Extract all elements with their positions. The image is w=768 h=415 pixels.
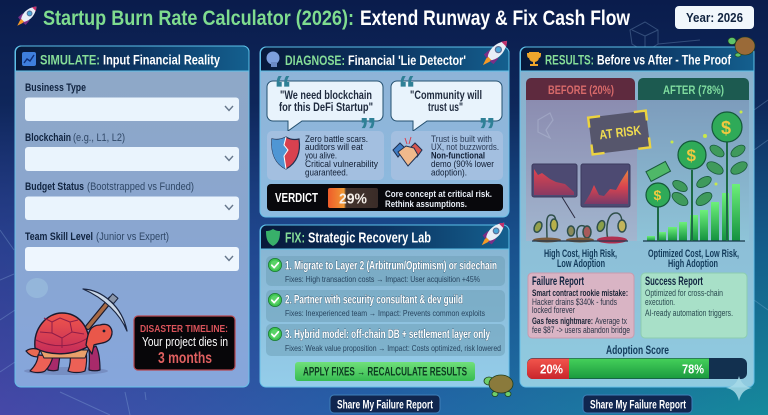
icon: handshake bbox=[393, 137, 422, 166]
card: battle scars: auditors will eat bbox=[305, 142, 363, 153]
card: trust: adoption). bbox=[431, 168, 467, 178]
heading: fix: FIX: bbox=[285, 230, 305, 246]
icon: trophy bbox=[527, 52, 541, 66]
card: failure report: Hacker drains $340k - funds bbox=[532, 297, 617, 307]
card: failure report: Failure Report bbox=[532, 276, 584, 288]
card: battle scars bbox=[267, 131, 384, 180]
field: blockchain: Blockchain bbox=[25, 132, 71, 144]
card: trust bbox=[391, 131, 503, 180]
heading: diagnose: Financial 'Lie Detector' bbox=[348, 53, 466, 68]
column: before: BEFORE (20%) bbox=[548, 85, 614, 97]
chart: adoption score bar bbox=[527, 358, 747, 379]
year badge bbox=[675, 6, 754, 29]
card: success report: AI-ready automation triggers. bbox=[645, 308, 733, 318]
heading: fix: Strategic Recovery Lab bbox=[308, 230, 431, 246]
icon: rocket bbox=[17, 7, 36, 26]
heading: diagnose bbox=[285, 53, 466, 68]
panel: simulate bbox=[15, 46, 249, 387]
fix item 2: 2. Partner with security consultant & dev guild bbox=[285, 294, 463, 306]
fix item 1 bbox=[266, 256, 505, 286]
charts: declining bbox=[532, 164, 630, 218]
button: share failure report: Share My Failure Report bbox=[590, 398, 686, 412]
column: after: AFTER (78%) bbox=[663, 85, 724, 97]
speech bubble 2: ” bbox=[478, 110, 496, 151]
verdict bar: 29% bbox=[339, 190, 367, 208]
heading: results bbox=[545, 52, 731, 68]
column: before bbox=[526, 78, 637, 244]
column: after bbox=[637, 78, 749, 241]
button: apply fixes bbox=[295, 362, 475, 381]
speech bubble 2: “ bbox=[398, 68, 416, 109]
fix item 3 bbox=[266, 324, 505, 356]
field: budget status: Budget Status bbox=[25, 181, 84, 193]
badge: at risk: AT RISK bbox=[598, 122, 642, 142]
card: failure report: locked forever bbox=[532, 305, 575, 315]
speech bubble 1 bbox=[267, 68, 383, 151]
title: Startup Burn Rate Calculator (2026): bbox=[43, 7, 354, 30]
caption: before bbox=[544, 248, 617, 270]
card: battle scars: guaranteed. bbox=[305, 168, 348, 178]
heading: simulate: Input Financial Reality bbox=[103, 52, 220, 68]
panel: fix bbox=[260, 223, 509, 387]
verdict bar: Core concept at critical risk. bbox=[385, 189, 492, 200]
heading: simulate bbox=[40, 52, 220, 68]
icon: turtle with pickaxe bbox=[24, 278, 127, 375]
field: team skill: Team Skill Level bbox=[25, 231, 93, 243]
card: success report: execution. bbox=[645, 297, 675, 307]
field: team skill bbox=[25, 231, 239, 271]
card: failure report: Average tx bbox=[595, 316, 627, 326]
card: success report: Success Report bbox=[645, 276, 703, 288]
fix item 1: Fixes: High transaction costs → Impact: User acquisition +45% bbox=[285, 274, 480, 284]
icon: rocket bbox=[483, 41, 507, 65]
field: team skill: (Junior vs Expert) bbox=[96, 231, 169, 243]
chart: adoption score bar: 78% bbox=[682, 362, 704, 376]
speech bubble 2: "Community will bbox=[410, 90, 482, 102]
icon: brain bbox=[266, 52, 280, 67]
card: failure report: Smart contract rookie mistake: bbox=[532, 288, 628, 298]
icon: small turtle bbox=[484, 375, 513, 396]
caption: after bbox=[648, 248, 739, 270]
plants: money: $ bbox=[721, 118, 731, 138]
heading: simulate: SIMULATE: bbox=[40, 52, 100, 68]
year badge: Year: 2026 bbox=[686, 10, 743, 25]
button: share failure report bbox=[583, 395, 692, 413]
speech bubble 1: "We need blockchain bbox=[280, 90, 372, 102]
plants: money bbox=[646, 110, 749, 241]
caption: before: High Cost, High Risk, bbox=[544, 248, 617, 260]
speech bubble 1: for this DeFi Startup" bbox=[279, 102, 373, 114]
verdict bar bbox=[267, 184, 503, 211]
fix item 3: 3. Hybrid model: off-chain DB + settlement layer only bbox=[285, 329, 490, 341]
icon: rocket bbox=[482, 223, 504, 245]
speech bubble 2 bbox=[391, 68, 502, 151]
panel: diagnose bbox=[260, 41, 509, 217]
fix item 1: 1. Migrate to Layer 2 (Arbitrum/Optimism) or sidechain bbox=[285, 260, 497, 272]
card: trust: UX, not buzzwords. bbox=[431, 142, 499, 153]
fix item 2: Fixes: Inexperienced team → Impact: Prevents common exploits bbox=[285, 308, 485, 318]
card: battle scars: Critical vulnerability bbox=[305, 159, 378, 170]
card: trust: Trust is built with bbox=[431, 134, 492, 145]
plants: wilted bbox=[532, 213, 628, 244]
button: apply fixes: APPLY FIXES → RECALCULATE RESULTS bbox=[303, 366, 467, 378]
icon: small turtle on results panel bbox=[728, 37, 755, 57]
button: share failure report: Share My Failure Report bbox=[337, 398, 433, 412]
icon: shield bbox=[266, 229, 280, 246]
callout: disaster timeline bbox=[134, 316, 235, 370]
heading: diagnose: DIAGNOSE: bbox=[285, 53, 345, 68]
callout: disaster timeline: 3 months bbox=[158, 350, 212, 367]
speech bubble 1: “ bbox=[274, 68, 292, 109]
plants: money: $ bbox=[686, 146, 696, 165]
card: failure report: fee $87 -> users abandon bridge bbox=[532, 325, 630, 335]
callout: disaster timeline: Your project dies in bbox=[142, 335, 228, 349]
chart: adoption score bar: 20% bbox=[540, 362, 563, 376]
speech bubble 1: ” bbox=[359, 110, 377, 151]
field: budget status bbox=[25, 181, 239, 220]
card: success report: Optimized for cross-chain bbox=[645, 288, 723, 298]
fix item 2 bbox=[266, 290, 505, 322]
plants: money: $ bbox=[654, 187, 662, 203]
heading: results: Before vs After - The Proof bbox=[597, 52, 731, 68]
card: failure report bbox=[528, 273, 634, 338]
heading: adoption score: Adoption Score bbox=[606, 345, 669, 357]
field: business type: Business Type bbox=[25, 82, 86, 94]
card: trust: demo (90% lower bbox=[431, 159, 494, 170]
card: battle scars: Zero battle scars. bbox=[305, 134, 368, 145]
caption: before: Low Adoption bbox=[557, 258, 605, 270]
badge: at risk bbox=[588, 111, 650, 154]
card: success report bbox=[641, 273, 747, 338]
field: business type bbox=[25, 82, 239, 121]
icon: sparkle bbox=[726, 376, 752, 401]
bar chart: growth bbox=[643, 184, 745, 241]
icon: chart bbox=[22, 52, 36, 66]
verdict bar: Rethink assumptions. bbox=[385, 199, 467, 210]
card: battle scars: you alive. bbox=[305, 150, 337, 162]
icon: cracked shield bbox=[272, 137, 299, 169]
speech bubble 2: trust us" bbox=[428, 102, 463, 114]
field: blockchain: (e.g., L1, L2) bbox=[73, 132, 125, 144]
button: share failure report bbox=[330, 395, 440, 413]
field: blockchain bbox=[25, 132, 239, 171]
field: budget status: (Bootstrapped vs Funded) bbox=[87, 181, 194, 193]
card: failure report: Gas fees nightmare: bbox=[532, 316, 593, 326]
panel: results bbox=[520, 47, 754, 387]
heading: results: RESULTS: bbox=[545, 52, 594, 68]
card: trust: Non-functional bbox=[431, 150, 485, 162]
heading: fix bbox=[285, 230, 431, 246]
title bbox=[17, 7, 631, 30]
title: Extend Runway & Fix Cash Flow bbox=[360, 7, 631, 30]
verdict bar: VERDICT bbox=[275, 190, 318, 205]
callout: disaster timeline: DISASTER TIMELINE: bbox=[140, 324, 228, 335]
fix item 3: Fixes: Weak value proposition → Impact: Costs optimized, risk lowered bbox=[285, 343, 501, 353]
caption: after: High Adoption bbox=[668, 258, 718, 270]
